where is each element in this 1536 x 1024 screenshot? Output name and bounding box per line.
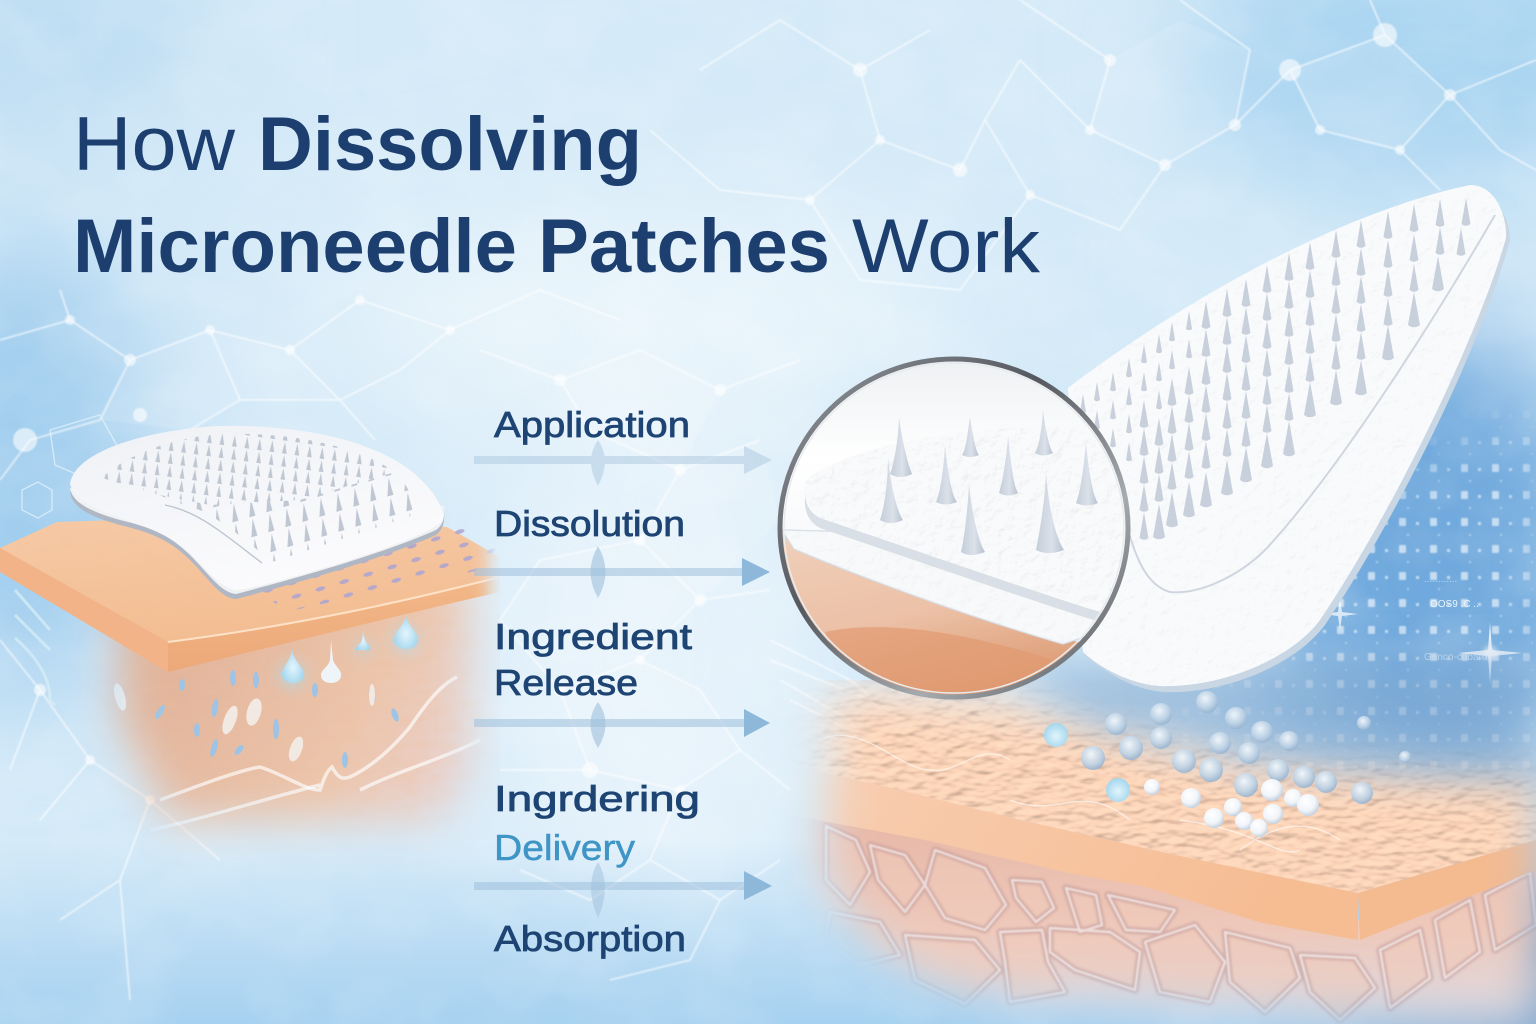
left skin block <box>0 520 500 880</box>
title <box>73 102 1041 289</box>
decorative line art, left <box>22 415 125 518</box>
left tissue accent lines <box>15 590 55 705</box>
magnified skin <box>770 530 1100 710</box>
ingredient specks on skin <box>264 529 496 610</box>
right face <box>1358 840 1536 940</box>
inner rim line <box>1125 215 1495 592</box>
arrow 3 <box>474 702 770 748</box>
title: How <box>73 102 236 187</box>
front face <box>780 763 1358 940</box>
slab front face <box>0 548 500 672</box>
deep cell layer <box>800 817 1536 1024</box>
slab <box>0 520 500 672</box>
small data labels: OOS9 .C .. <box>1430 599 1479 610</box>
step labels <box>494 404 700 959</box>
arrow 4 <box>474 862 772 918</box>
patch body <box>1068 185 1506 686</box>
bumpy top surface <box>780 680 1536 893</box>
molecular cell fills <box>100 20 1450 790</box>
title: Dissolving <box>258 102 642 187</box>
patch under layers <box>70 492 444 599</box>
small data labels <box>1424 580 1487 660</box>
bluish haze over back of skin <box>1000 660 1536 780</box>
inner rim line <box>165 505 262 563</box>
large needles <box>1153 256 1444 539</box>
step labels: Delivery <box>494 827 635 868</box>
data dot field, right <box>1183 412 1534 768</box>
patch body <box>70 426 443 590</box>
small data labels: ............ <box>1424 574 1457 585</box>
large patch, right <box>1068 185 1510 692</box>
title: Microneedle Patches <box>73 204 830 289</box>
patch shadow layer <box>1083 208 1510 692</box>
step labels: Release <box>494 662 638 703</box>
magnified patch top layer <box>805 429 1135 632</box>
step labels: Ingrdering <box>494 778 700 819</box>
pearls: released ingredient <box>1044 691 1411 837</box>
lens interior <box>770 350 1140 710</box>
step labels: Application <box>494 404 690 445</box>
medium needles <box>1140 198 1470 540</box>
magnifier lens <box>770 350 1140 710</box>
arrow 1 <box>474 440 772 486</box>
molecular nodes <box>13 23 1456 805</box>
needle array <box>104 434 412 562</box>
small needles <box>1080 311 1192 461</box>
small patch, left <box>70 426 444 599</box>
magnified needles <box>880 410 1098 555</box>
droplet glow <box>280 628 417 687</box>
cell shading <box>825 826 1536 1020</box>
sparkle <box>1322 597 1522 684</box>
magnified patch base layer <box>782 530 1135 644</box>
needle array <box>1080 198 1470 540</box>
step labels: Ingredient <box>494 616 692 657</box>
lower tissue <box>90 594 494 848</box>
flow arrows <box>474 440 772 918</box>
slab top surface <box>0 520 500 642</box>
lens ring <box>780 359 1128 697</box>
title: Work <box>852 204 1041 289</box>
arrow 2 <box>474 546 770 598</box>
droplets <box>282 615 418 683</box>
step labels: Absorption <box>494 918 686 959</box>
white vein strands <box>820 735 1340 852</box>
right skin block <box>780 680 1536 1024</box>
cell outlines <box>825 826 1536 1020</box>
small data labels: Ganco-cubard <box>1424 652 1487 663</box>
step labels: Dissolution <box>494 503 685 544</box>
